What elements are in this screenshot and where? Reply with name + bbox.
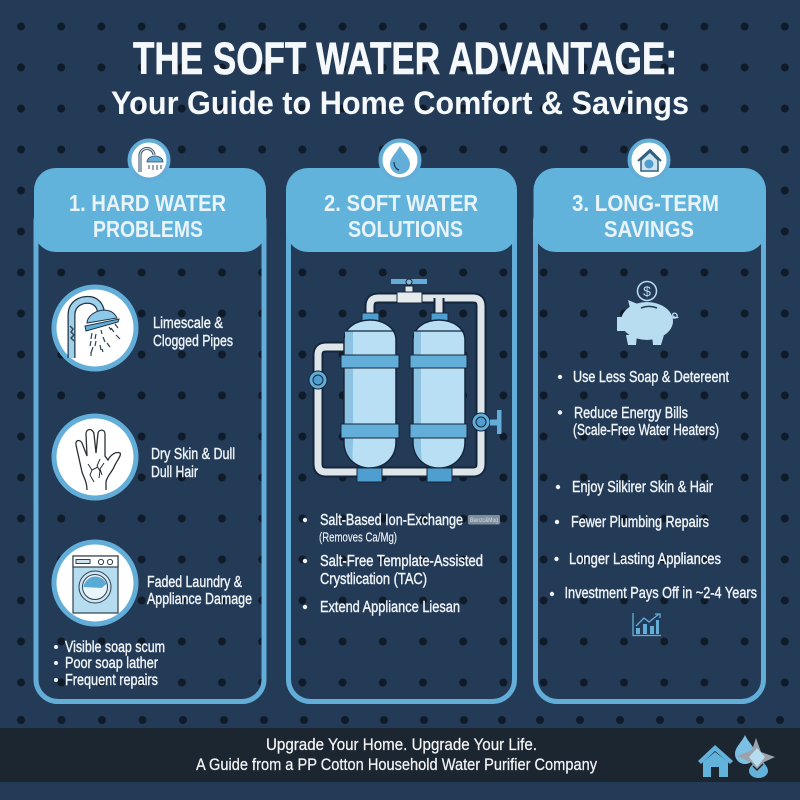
icon: washing machine: [54, 542, 136, 624]
label: limescale: Limescale &: [153, 315, 224, 332]
list: softening solutions: Salt-Based Ion-Exchange: [320, 512, 463, 529]
list: softening solutions: [303, 512, 500, 616]
list: softening solutions: Salt-Free Template-Assisted: [320, 553, 483, 570]
panel: long-term savings: [534, 140, 766, 702]
panel heading: hard water problems: [34, 168, 266, 252]
list: softening solutions: Extend Appliance Liesan: [320, 599, 460, 616]
tag: small annotation: Bienzc&Mog: [470, 518, 498, 524]
panel heading: soft water solutions: [286, 168, 517, 252]
icon: piggy bank with coin: $: [643, 283, 651, 299]
list: softening solutions: Crystlication (TAC): [320, 571, 427, 588]
panel: soft water solutions: [286, 140, 517, 702]
list: savings benefits: (Scale-Free Water Heaters): [573, 422, 719, 439]
label: dry skin: [151, 446, 235, 481]
panel heading: hard water problems: PROBLEMS: [93, 216, 203, 242]
icon: water drop badge: [380, 140, 420, 180]
footer text: Upgrade Your Home. Upgrade Your Life.: [266, 735, 537, 754]
title: [111, 33, 689, 121]
list: savings benefits: [550, 369, 757, 602]
list: savings benefits: Longer Lasting Appliances: [569, 551, 721, 568]
panel heading: soft water solutions: 2. SOFT WATER: [324, 190, 478, 216]
icon: shower with limescale: [54, 287, 136, 369]
list: softening solutions: (Removes Ca/Mg): [319, 530, 397, 544]
label: faded laundry: Appliance Damage: [147, 591, 252, 608]
label: limescale: [153, 315, 233, 350]
list: savings benefits: Fewer Plumbing Repairs: [571, 514, 709, 531]
icon: water drops: [735, 735, 775, 778]
list: savings benefits: Use Less Soap & Detereent: [573, 369, 730, 386]
footer text: A Guide from a PP Cotton Household Water Purifier Company: [196, 755, 597, 774]
list: hard water symptoms: Frequent repairs: [65, 672, 158, 689]
panel heading: long-term savings: [534, 168, 766, 252]
diagram: twin tank water softener: [309, 279, 502, 482]
tag: small annotation: [468, 515, 500, 524]
title: Your Guide to Home Comfort & Savings: [111, 85, 689, 121]
list: savings benefits: Investment Pays Off in ~2-4 Years: [564, 585, 757, 602]
label: dry skin: Dry Skin & Dull: [151, 446, 235, 463]
label: faded laundry: [147, 574, 252, 608]
list: hard water symptoms: [54, 639, 165, 689]
panel heading: hard water problems: 1. HARD WATER: [69, 190, 226, 216]
list: savings benefits: Reduce Energy Bills: [574, 405, 688, 422]
label: dry skin: Dull Hair: [151, 464, 198, 481]
icon: piggy bank with coin: [617, 282, 678, 345]
footer text: [196, 735, 597, 774]
list: savings benefits: Enjoy Silkirer Skin & Hair: [572, 479, 713, 496]
label: faded laundry: Faded Laundry &: [147, 574, 243, 591]
icon: dry hand: [54, 416, 136, 498]
panel heading: long-term savings: SAVINGS: [604, 216, 694, 242]
icon: shower badge: [130, 140, 168, 180]
icon: growth chart: [633, 613, 661, 636]
icon: house: [698, 745, 733, 777]
list: hard water symptoms: Poor soap lather: [65, 655, 158, 672]
icon: house badge: [630, 140, 668, 180]
panel heading: long-term savings: 3. LONG-TERM: [572, 190, 719, 216]
footer band: [0, 728, 800, 782]
label: limescale: Clogged Pipes: [153, 333, 233, 350]
panel heading: soft water solutions: SOLUTIONS: [348, 216, 463, 242]
panel: hard water problems: [34, 140, 266, 702]
list: hard water symptoms: Visible soap scum: [65, 639, 165, 656]
